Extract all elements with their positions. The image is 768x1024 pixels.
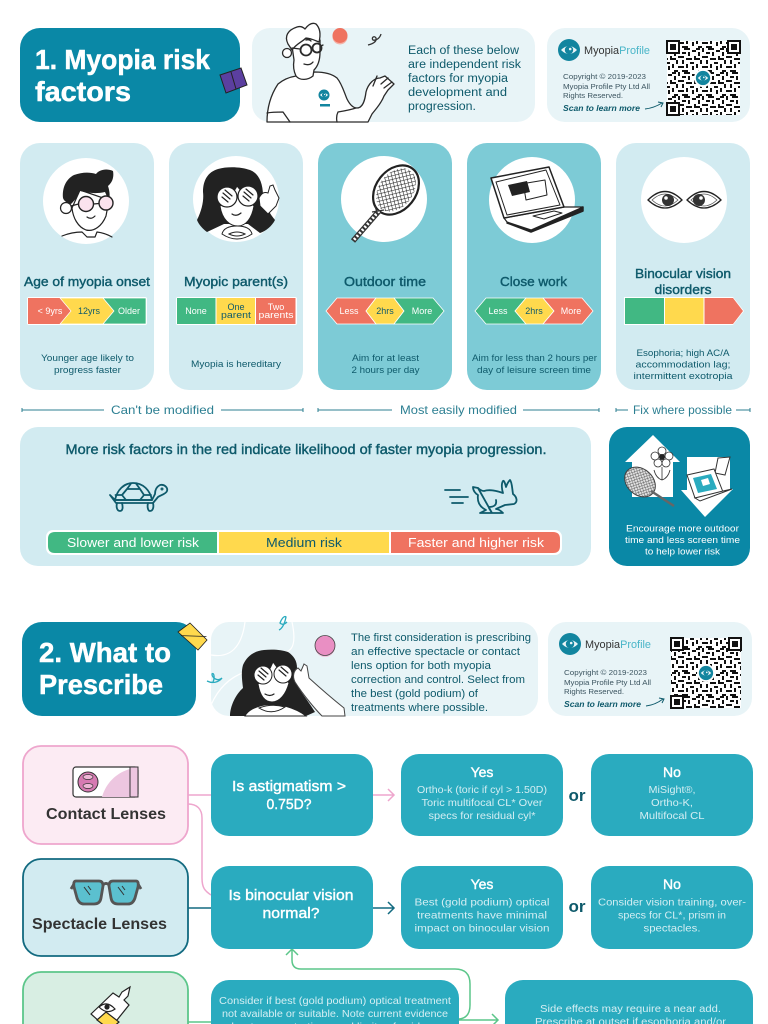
caption xyxy=(625,524,740,558)
description: intermittent exotropia xyxy=(634,371,733,382)
box: side effects text xyxy=(505,980,753,1024)
title: 2. What to Prescribe: Prescribe xyxy=(39,669,163,700)
or 1: or xyxy=(568,786,586,805)
QR code xyxy=(667,41,740,115)
legend bar xyxy=(46,530,562,555)
scale: binocular xyxy=(624,297,744,325)
icon: squiggle xyxy=(368,34,381,45)
label: Spectacle Lenses xyxy=(32,916,167,933)
icon: squiggles xyxy=(207,617,287,682)
icon: mascot man xyxy=(267,23,394,122)
scale: parents: parents xyxy=(258,310,294,320)
answer: yes astigmatism: Toric multifocal CL* Over xyxy=(422,797,543,809)
description xyxy=(472,353,597,376)
scale: outdoor xyxy=(326,298,444,324)
answer: yes binocular xyxy=(401,866,563,949)
panel: logo and QR 2: Copyright © 2019-2023 xyxy=(564,668,647,677)
question: astigmatism: 0.75D? xyxy=(266,797,312,813)
title: 1. Myopia risk factors: factors xyxy=(35,76,131,107)
answer: no binocular xyxy=(591,866,753,949)
box: consider atropine text: not available or suitable. Note current evidence xyxy=(222,1009,448,1020)
scale: close work xyxy=(475,298,593,324)
answer: yes astigmatism xyxy=(401,754,563,836)
answer: no binocular: No xyxy=(663,876,681,892)
heading xyxy=(635,266,731,297)
icon: shirt logo xyxy=(318,90,330,106)
scale: parents xyxy=(176,297,297,325)
connector: atropine paths xyxy=(188,949,498,1024)
box: Spectacle Lenses xyxy=(23,859,188,956)
answer: yes binocular: treatments have minimal xyxy=(417,910,547,922)
heading: Binocular vision xyxy=(635,266,731,281)
question: binocular vision xyxy=(211,866,373,949)
legend bar: Slower and lower risk xyxy=(67,535,200,550)
QR code xyxy=(671,638,741,708)
answer: yes astigmatism: Ortho-k (toric if cyl > 1.50D) xyxy=(417,784,547,796)
answer: no astigmatism: MiSight®, xyxy=(648,784,696,796)
heading: Age of myopia onset xyxy=(24,274,150,289)
panel: encourage outdoor time xyxy=(609,427,750,566)
scale: age xyxy=(27,297,147,325)
box: eye drops xyxy=(23,972,188,1024)
intro text: lens option for both myopia xyxy=(351,660,492,672)
intro text: factors for myopia xyxy=(408,73,509,85)
card: Myopic parents xyxy=(169,143,303,390)
panel: prescribe intro with illustration xyxy=(207,617,538,716)
heading: Myopic parent(s) xyxy=(184,274,288,289)
panel: logo and QR 1: Myopia Profile Pty Ltd All xyxy=(563,82,650,91)
question: binocular vision: Is binocular vision xyxy=(228,888,354,904)
intro text: progression. xyxy=(408,101,476,113)
question: astigmatism xyxy=(211,754,373,836)
box: side effects text: Side effects may require a near add. xyxy=(540,1004,721,1015)
intro text: the best (gold podium) of xyxy=(351,688,479,700)
or 2: or xyxy=(568,897,586,916)
description xyxy=(41,353,134,376)
description xyxy=(352,353,420,376)
panel: intro with mascot xyxy=(252,23,535,122)
intro text xyxy=(408,45,521,113)
icon: down arrow with laptop xyxy=(681,457,733,517)
intro text: are independent risk xyxy=(408,59,521,71)
answer: yes binocular: impact on binocular vision xyxy=(414,922,550,934)
panel: logo and QR 2: MyopiaProfile xyxy=(585,639,651,651)
question: astigmatism: Is astigmatism > xyxy=(232,779,346,795)
answer: no binocular: specs for CL*, prism in xyxy=(618,910,726,922)
intro text: Each of these below xyxy=(408,45,520,57)
description: accommodation lag; xyxy=(636,360,730,370)
description: Esophoria; high AC/A xyxy=(636,348,730,359)
intro text: The first consideration is prescribing xyxy=(351,632,531,644)
caption: Encourage more outdoor xyxy=(626,524,739,534)
heading: More risk factors in the red indicate likelihood of faster myopia progression. xyxy=(66,441,546,457)
panel: logo and QR 2: Myopia Profile Pty Ltd All xyxy=(564,678,651,687)
description: Younger age likely to xyxy=(41,353,134,364)
icon: boy with glasses xyxy=(60,170,113,237)
answer: no binocular: spectacles. xyxy=(644,922,700,934)
box: Contact Lenses xyxy=(23,746,188,844)
panel: logo and QR 1: Copyright © 2019-2023 xyxy=(563,72,646,81)
icon: girl with glasses xyxy=(197,167,279,239)
description: Aim for less than 2 hours per xyxy=(472,353,597,364)
panel: logo and QR 1: MyopiaProfile xyxy=(584,45,650,57)
description: progress faster xyxy=(54,365,121,376)
panel: logo and QR 2 xyxy=(548,622,752,716)
scale: parents: Two xyxy=(268,302,284,312)
scale: close work: Less xyxy=(488,306,508,316)
heading: Close work xyxy=(500,274,568,289)
icon: eyes xyxy=(648,192,721,208)
label: Most easily modified: Most easily modified xyxy=(400,403,517,417)
intro text: an effective spectacle or contact xyxy=(351,646,520,658)
intro text: treatments where possible. xyxy=(351,702,488,714)
caption: to help lower risk xyxy=(645,546,720,558)
intro text: development and xyxy=(408,87,507,99)
scale: age: Older xyxy=(118,306,140,316)
scale: outdoor: 2hrs xyxy=(376,306,394,316)
scale: age: 12yrs xyxy=(78,306,100,316)
scale: age: < 9yrs xyxy=(38,306,63,316)
scale: parents: One xyxy=(227,302,245,312)
title: 2. What to Prescribe: 2. What to xyxy=(39,637,171,668)
label: Can't be modified xyxy=(22,403,303,417)
icon: laptop xyxy=(491,167,583,232)
scale: close work: More xyxy=(561,306,581,316)
question: binocular vision: normal? xyxy=(262,906,320,922)
answer: no binocular: Consider vision training, over- xyxy=(598,896,747,908)
answer: yes astigmatism: Yes xyxy=(471,764,493,780)
legend bar: Faster and higher risk xyxy=(408,535,545,550)
title: 1. Myopia risk factors: 1. Myopia risk xyxy=(35,44,210,75)
answer: no astigmatism: Multifocal CL xyxy=(640,810,705,822)
connector: contact lens paths xyxy=(188,789,394,895)
card: Close work xyxy=(467,143,601,390)
description: Aim for at least xyxy=(352,353,419,364)
icon: up arrow with racket and flower xyxy=(619,435,680,506)
scale: close work: 2hrs xyxy=(525,306,543,316)
answer: no astigmatism: No xyxy=(663,764,681,780)
label: Contact Lenses xyxy=(46,806,166,823)
intro text: correction and control. Select from xyxy=(351,674,525,686)
legend bar: Medium risk xyxy=(266,535,343,550)
panel: logo and QR 2: Rights Reserved. xyxy=(564,687,624,696)
description: 2 hours per day xyxy=(352,365,420,376)
scale: parents: parent xyxy=(221,310,252,320)
icon: eye drop bottle xyxy=(91,987,130,1024)
scale: parents: None xyxy=(185,306,207,316)
card: Outdoor time xyxy=(318,143,452,390)
intro text xyxy=(351,632,531,714)
icon: tennis racket xyxy=(353,156,428,241)
label: Fix where possible: Fix where possible xyxy=(633,403,732,417)
scale: outdoor: Less xyxy=(339,306,359,316)
panel: logo and QR 1: Scan to learn more xyxy=(563,103,640,113)
icon: glasses xyxy=(71,881,141,904)
description xyxy=(634,348,733,382)
icon: pink ball xyxy=(315,636,335,657)
title: 2. What to Prescribe xyxy=(22,622,207,716)
label: Most easily modified xyxy=(318,403,599,417)
icon: turtle xyxy=(110,483,167,511)
answer: yes binocular: Best (gold podium) optical xyxy=(414,896,550,908)
answer: yes binocular: Yes xyxy=(471,876,493,892)
answer: no astigmatism: Ortho-K, xyxy=(651,797,693,809)
panel: logo and QR 1 xyxy=(547,28,750,122)
icon: contact lens case xyxy=(73,767,138,797)
box: consider atropine text: Consider if best (gold podium) optical treatment xyxy=(219,996,451,1007)
panel: risk summary xyxy=(20,427,591,566)
icon: red ball xyxy=(332,28,348,44)
answer: yes astigmatism: specs for residual cyl* xyxy=(428,810,536,822)
description: Myopia is hereditary xyxy=(191,359,281,370)
card: Binocular vision disorders xyxy=(616,143,750,390)
answer: no astigmatism xyxy=(591,754,753,836)
heading: disorders xyxy=(654,282,712,297)
panel: logo and QR 1: Rights Reserved. xyxy=(563,91,623,100)
panel: logo and QR 2: Scan to learn more xyxy=(564,699,641,709)
label: Can't be modified: Can't be modified xyxy=(111,403,214,417)
icon: girl illustration xyxy=(230,650,345,716)
description: day of leisure screen time xyxy=(477,365,591,376)
title: 1. Myopia risk factors xyxy=(20,28,247,122)
scale: outdoor: More xyxy=(412,306,432,316)
heading: Outdoor time xyxy=(344,274,426,289)
caption: time and less screen time xyxy=(625,535,740,546)
connector: spectacle paths xyxy=(188,902,394,914)
box: consider atropine text xyxy=(211,980,459,1024)
icon: rabbit xyxy=(445,480,517,513)
card: Age of myopia onset xyxy=(20,143,154,390)
